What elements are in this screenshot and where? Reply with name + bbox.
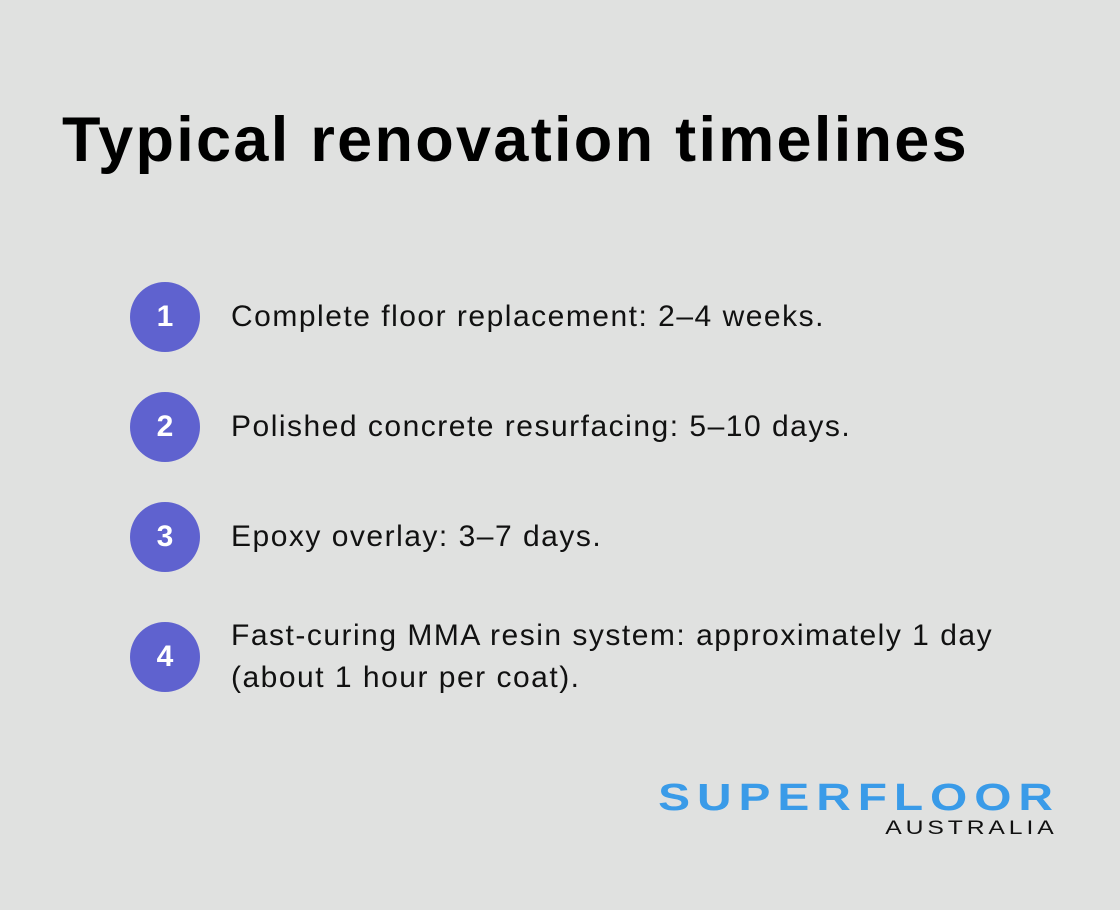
badge 3	[130, 502, 200, 572]
title: Typical renovation timelines	[62, 105, 969, 175]
text 4	[231, 619, 993, 694]
badge 2: 2	[157, 410, 173, 443]
text 1: Complete floor replacement: 2–4 weeks.	[231, 300, 825, 333]
badge 3: 3	[157, 520, 173, 553]
logo	[658, 777, 1060, 839]
text 2: Polished concrete resurfacing: 5–10 days.	[231, 410, 851, 443]
badge 1	[130, 282, 200, 352]
item 3	[130, 502, 602, 572]
text 3: Epoxy overlay: 3–7 days.	[231, 520, 602, 553]
text 4: (about 1 hour per coat).	[231, 661, 581, 694]
badge 2	[130, 392, 200, 462]
logo: AUSTRALIA	[886, 818, 1058, 839]
badge 1: 1	[157, 300, 173, 333]
badge 4: 4	[157, 640, 173, 673]
text 4: Fast-curing MMA resin system: approximately 1 day	[231, 619, 993, 652]
item 4	[130, 619, 993, 694]
logo: SUPERFLOOR	[658, 777, 1060, 819]
item 2	[130, 392, 851, 462]
badge 4	[130, 622, 200, 692]
item 1	[130, 282, 825, 352]
